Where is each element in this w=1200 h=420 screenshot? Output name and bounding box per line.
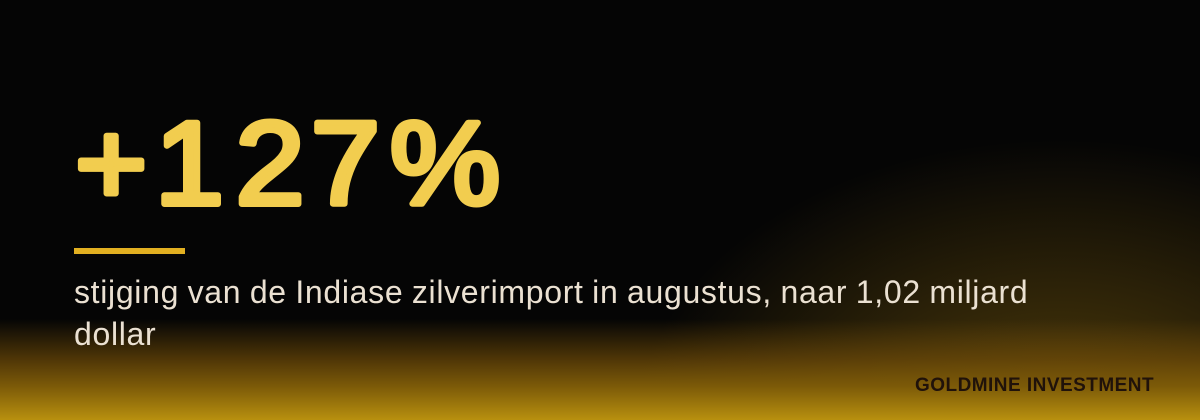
description: dollar [74, 316, 156, 352]
brand label: GOLDMINE INVESTMENT [915, 375, 1154, 396]
description: stijging van de Indiase zilverimport in augustus, naar 1,02 miljard [74, 274, 1028, 310]
accent rule [74, 248, 185, 254]
description [74, 274, 1028, 352]
big number: +127% [75, 97, 500, 229]
